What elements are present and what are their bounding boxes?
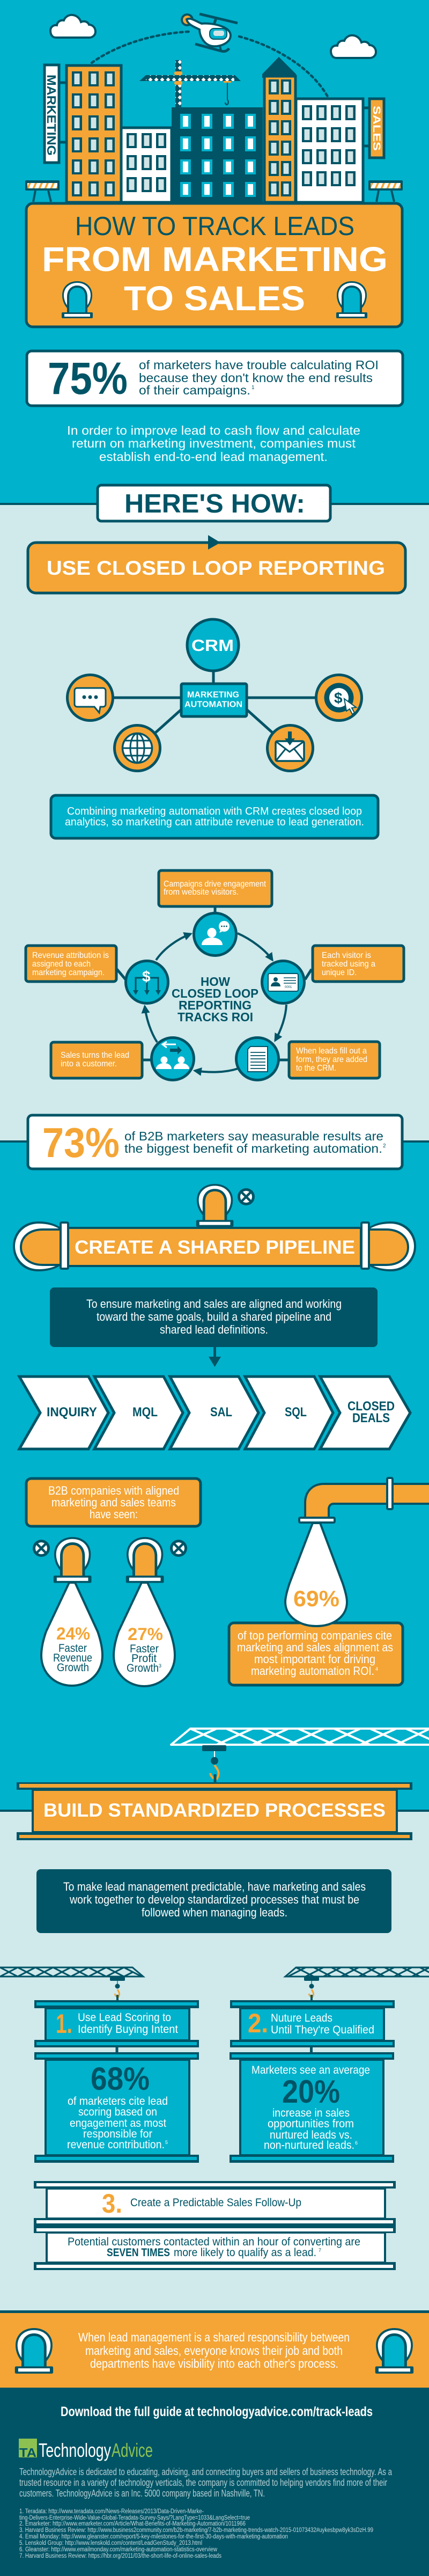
crane jib: right truss: [285, 1967, 429, 1977]
callout: B2B companies: have seen:: [90, 1507, 138, 1521]
icon: visitor id card: [262, 961, 305, 1004]
icon: valve: [238, 1188, 255, 1205]
icon: chat bubble: [68, 675, 113, 720]
icon: lead form: [236, 1038, 279, 1080]
stat panel: 73 percent: of B2B marketers say measurable results are: [124, 1129, 383, 1143]
icon: revenue split: [125, 961, 168, 1004]
step two title: Until They're Qualified: [271, 2024, 374, 2036]
text block: standardized processes intro: followed when managing leads.: [142, 1906, 287, 1919]
heading: build standardized processes: BUILD STANDARDIZED PROCESSES: [43, 1800, 386, 1821]
title panel: [26, 203, 402, 327]
callout: top performing companies: 4: [375, 1666, 378, 1672]
icon: bottom right arch: [375, 2328, 413, 2374]
stage: closed deals: [320, 1377, 410, 1449]
heading: use closed loop reporting: USE CLOSED LOOP REPORTING: [47, 557, 385, 579]
diagram: closed loop cycle: [26, 870, 404, 1080]
icon: top pipe outlet: [196, 1184, 233, 1227]
loop center title: CLOSED LOOP: [172, 986, 258, 1000]
stat drop: 24 percent: Growth: [57, 1662, 89, 1674]
title line two: FROM MARKETING: [42, 240, 388, 279]
stat description: because they don't know the end results: [139, 371, 373, 385]
text block: shared pipeline intro: [50, 1287, 378, 1347]
marketing automation box: [181, 684, 247, 716]
panel: step three follow-up: [34, 2181, 396, 2270]
icon: bottom left arch: [15, 2328, 53, 2374]
stat drop: 24 percent: [41, 1583, 102, 1686]
company description: customers. TechnologyAdvice is an Inc. 5000 company based in Nashville, TN.: [19, 2488, 265, 2499]
stat description: revenue contribution.: [67, 2139, 165, 2151]
stat panel: 73 percent: the biggest benefit of marketing automation.: [124, 1141, 382, 1155]
stat description: of marketers have trouble calculating ROI: [139, 358, 379, 372]
callout: top performing companies: marketing and sales alignment as: [237, 1641, 393, 1654]
title line one: HOW TO TRACK LEADS: [75, 212, 354, 241]
source references: [19, 2508, 373, 2559]
sales sign: [363, 99, 384, 158]
stat description: engagement as most: [70, 2117, 166, 2129]
icon: visitor id card: 0001: [285, 986, 292, 989]
stat panel: 73 percent: [28, 1115, 402, 1169]
stage: SQL: [245, 1377, 333, 1449]
source references: 2. Emarketer: http://www.emarketer.com/Article/What-Benefits-of-Marketing-Automation/1011966: [19, 2521, 246, 2527]
crane jib: white truss: [171, 1729, 429, 1745]
stat description: of their campaigns.: [139, 383, 250, 397]
text block: shared pipeline intro: To ensure marketing and sales are aligned and working: [86, 1297, 342, 1311]
CRM circle: CRM: [191, 636, 234, 655]
step box: form fill: [289, 1042, 380, 1078]
icon: dollar click: [316, 675, 361, 720]
callout: B2B companies: B2B companies with aligned: [48, 1484, 179, 1497]
step three description: Potential customers contacted within an hour of converting are: [68, 2236, 360, 2248]
source references: ting-Delivers-Enterprise-Wide-Value-Global-Teradata-Survey-Says/?LangType=1033&LangSelect=true: [19, 2515, 250, 2521]
icon: sales people: [151, 1038, 194, 1080]
marketing sign: MARKETING: [45, 75, 58, 156]
stage: SAL: SAL: [210, 1405, 232, 1419]
CRM circle: [187, 619, 239, 671]
panel: step two nurture leads: [230, 2000, 395, 2163]
stat lead-in: Marketers see an average: [252, 2064, 370, 2076]
step number two: 2.: [248, 2008, 268, 2038]
intro paragraph: [67, 423, 360, 464]
heading: use closed loop reporting: [28, 535, 405, 593]
panel: step one lead scoring: [34, 2000, 199, 2163]
step box: revenue attribution: Revenue attribution is: [32, 951, 109, 960]
step box: sales: [51, 1042, 142, 1078]
step one title: [78, 2011, 178, 2036]
loop center title: [172, 975, 258, 1024]
icon: engaged visitor: [194, 913, 236, 955]
crane jib: left truss: [0, 1967, 143, 1977]
text block: standardized processes intro: To make lead management predictable, have marketing and sales: [63, 1880, 366, 1893]
stat description: 1: [252, 385, 255, 391]
icon: left cloud: [50, 15, 95, 38]
cycle arrows: [145, 933, 286, 1072]
step one title: Identify Buying Intent: [78, 2023, 178, 2036]
stat drop: 24 percent: Faster: [58, 1642, 87, 1655]
text block: standardized processes intro: work together to develop standardized processes that must be: [69, 1893, 359, 1906]
sales sign: SALES: [371, 106, 382, 151]
icon: globe: [115, 726, 160, 771]
construction crane: [139, 60, 241, 107]
icon: left arch pipe: [62, 281, 93, 318]
text block: shared pipeline intro: toward the same goals, build a shared pipeline and: [97, 1310, 331, 1323]
dotted flight path: [92, 32, 328, 97]
stage: SAL: [170, 1377, 258, 1449]
callout: top performing companies: [229, 1623, 403, 1685]
building: white low block: [121, 128, 172, 202]
conclusion text: marketing and sales, everyone knows their job and both: [85, 2344, 343, 2358]
stat description: opportunities from: [268, 2118, 354, 2130]
callout: top performing companies: marketing automation ROI.: [251, 1664, 374, 1678]
stat number: 75%: [48, 353, 128, 404]
stat description: [264, 2107, 358, 2151]
stage: SQL: SQL: [285, 1405, 307, 1419]
stage: closed deals: DEALS: [352, 1411, 390, 1425]
stat description: 6: [355, 2140, 358, 2146]
marketing sign: [45, 65, 65, 163]
stat description: nurtured leads vs.: [270, 2129, 352, 2141]
title line three: TO SALES: [124, 279, 305, 318]
callout: B2B companies: marketing and sales teams: [51, 1496, 176, 1509]
marketing automation box: AUTOMATION: [184, 700, 242, 709]
step three description: SEVEN TIMES: [107, 2246, 170, 2259]
connector lines: [117, 907, 312, 1060]
pipeline stages: [19, 1377, 410, 1449]
heading: create a shared pipeline: CREATE A SHARED PIPELINE: [75, 1237, 355, 1258]
step number three: 3.: [102, 2189, 122, 2219]
step box: revenue attribution: marketing campaign.: [32, 968, 105, 977]
crane hook left: [110, 1977, 125, 2000]
step three title: Create a Predictable Sales Follow-Up: [130, 2197, 301, 2209]
intro paragraph: return on marketing investment, companies must: [72, 436, 356, 450]
step two title: Nuture Leads: [271, 2012, 332, 2024]
source references: 7. Harvard Business Review: https://hbr.org/2011/03/the-short-life-of-online-sales-leads: [19, 2553, 221, 2559]
TechnologyAdvice logo: TA: [19, 2446, 36, 2460]
stat drop: 69 percent: [285, 1523, 347, 1626]
icon: incoming mail: [267, 726, 313, 771]
stat 68 percent: 68%: [91, 2061, 150, 2097]
step box: campaigns: from website visitors.: [164, 888, 239, 897]
company description: [19, 2467, 393, 2499]
step box: visitor id: [313, 946, 404, 982]
stat drop: 24 percent: Revenue: [53, 1652, 92, 1664]
building: orange marketing tower: [66, 65, 121, 202]
callout: combining marketing automation: analytics, so marketing can attribute revenue to lead generation.: [65, 816, 364, 828]
stat drop: 27 percent: Growth: [127, 1662, 159, 1674]
heading: build standardized processes: [17, 1782, 412, 1840]
building: navy block: [172, 107, 263, 202]
conclusion text: When lead management is a shared responsibility between: [78, 2330, 350, 2344]
step three description: [68, 2236, 360, 2259]
icon: dollar click: $: [334, 690, 343, 706]
callout: top performing companies: of top performing companies cite: [238, 1629, 392, 1642]
stat description: responsible for: [83, 2128, 152, 2140]
stage: MQL: [94, 1377, 183, 1449]
step number one: 1.: [56, 2009, 72, 2039]
stage: inquiry: INQUIRY: [47, 1405, 97, 1419]
building: orange spire tower: [262, 57, 296, 202]
left road barricade: [25, 180, 60, 202]
source references: 5. Lenskold Group: http://www.lenskold.com/content/LeadGenStudy_2013.html: [19, 2540, 202, 2546]
stat panel: 73 percent: 2: [383, 1143, 386, 1149]
heading: create a shared pipeline: [13, 1184, 416, 1271]
text block: standardized processes intro: [36, 1869, 391, 1933]
TechnologyAdvice logo: Advice: [112, 2439, 153, 2461]
pipe body: [13, 1221, 416, 1271]
step box: campaigns: Campaigns drive engagement: [164, 880, 266, 889]
step two title: [271, 2012, 374, 2036]
stat panel: 75 percent: [27, 351, 403, 406]
step box: visitor id: tracked using a: [322, 960, 375, 969]
loop center title: REPORTING: [179, 998, 252, 1012]
source references: 6. Gleanster: http://www.emailmonday.com/marketing-automation-statistics-overview: [19, 2546, 218, 2553]
callout: top performing companies: most important for driving: [254, 1652, 375, 1666]
source references: 4. Email Monday: http://www.gleanster.com/report/5-key-milestones-for-the-first-30-days-with-marketing-automation: [19, 2534, 288, 2540]
conclusion text: [78, 2330, 350, 2370]
TechnologyAdvice logo: Technology: [39, 2439, 111, 2461]
step box: revenue attribution: [26, 946, 116, 982]
callout: combining marketing automation: [51, 795, 378, 838]
heading: here's how: [98, 485, 330, 521]
source references: 3. Harvard Business Review: http://www.business2community.com/b2b-marketing/7-b2b-marketing-trends-watch-2015-01073432#uykesbpw8yk3sDzH.99: [19, 2527, 373, 2534]
stat description: non-nurtured leads.: [264, 2139, 354, 2151]
icon: helicopter: [181, 13, 238, 52]
callout: B2B companies: [26, 1479, 201, 1526]
stat description: 5: [165, 2140, 168, 2145]
crane hook: [202, 1745, 226, 1783]
step three description: more likely to qualify as a lead.: [174, 2246, 316, 2259]
diagram: CRM hub: [68, 619, 361, 771]
icon: right cloud: [331, 35, 376, 58]
intro paragraph: establish end-to-end lead management.: [99, 450, 328, 464]
heading: here's how: HERE'S HOW:: [124, 489, 305, 518]
arrow: down to pipeline stages: [209, 1347, 221, 1367]
stat description: [67, 2095, 168, 2151]
stat drop: 27 percent: [114, 1583, 175, 1686]
conclusion text: departments have visibility into each other's process.: [90, 2357, 338, 2370]
step box: campaigns: [159, 870, 272, 906]
loop center title: HOW: [201, 975, 230, 989]
stat drop: 69 percent: 69%: [293, 1586, 339, 1611]
stat drop: 27 percent: 3: [159, 1663, 161, 1668]
source references: 1. Teradata: http://www.teradata.com/News-Releases/2013/Data-Driven-Marke-: [19, 2508, 204, 2515]
callout: combining marketing automation: Combining marketing automation with CRM creates closed loop: [67, 806, 362, 817]
step box: form fill: form, they are added: [296, 1055, 367, 1064]
step box: form fill: When leads fill out a: [296, 1046, 367, 1056]
stat description: [139, 358, 379, 397]
stage: inquiry: [19, 1377, 108, 1449]
step box: revenue attribution: assigned to each: [32, 960, 91, 969]
stat panel: 73 percent: 73%: [42, 1119, 120, 1166]
right road barricade: [368, 180, 403, 202]
stage: MQL: MQL: [132, 1405, 158, 1419]
stage: closed deals: CLOSED: [347, 1399, 395, 1414]
intro paragraph: In order to improve lead to cash flow and calculate: [67, 423, 360, 437]
stat description: increase in sales: [272, 2107, 350, 2119]
step one title: Use Lead Scoring to: [78, 2011, 171, 2024]
building: white sales block: [296, 99, 363, 202]
crane hook right: [304, 1977, 319, 2000]
stat drop: 27 percent: 27%: [128, 1624, 163, 1644]
icon: right valve: [170, 1540, 187, 1557]
step box: visitor id: unique ID.: [322, 968, 357, 977]
icon: right arch pipe: [336, 281, 367, 318]
text block: shared pipeline intro: shared lead definitions.: [160, 1323, 268, 1336]
stat drop: 27 percent: Profit: [131, 1652, 157, 1665]
icon: revenue split: $: [142, 968, 151, 985]
step box: visitor id: Each visitor is: [322, 951, 371, 960]
step three description: 7: [319, 2248, 321, 2253]
stat description: of marketers cite lead: [68, 2095, 168, 2107]
stat drop: 27 percent: Faster: [130, 1643, 159, 1655]
stat 20 percent: 20%: [282, 2074, 340, 2110]
icon: left valve: [33, 1540, 50, 1557]
stat description: scoring based on: [78, 2106, 157, 2118]
loop center title: TRACKS ROI: [177, 1010, 253, 1024]
stat drop: 24 percent: 24%: [56, 1624, 90, 1643]
step box: sales: into a customer.: [61, 1059, 117, 1069]
step box: form fill: to the CRM.: [296, 1064, 336, 1073]
step box: sales: Sales turns the lead: [61, 1051, 129, 1060]
marketing automation box: MARKETING: [187, 690, 239, 700]
icon: right outlet pipe: [126, 1537, 164, 1583]
icon: left outlet pipe: [54, 1537, 92, 1583]
faucet pipe: [299, 1478, 429, 1523]
